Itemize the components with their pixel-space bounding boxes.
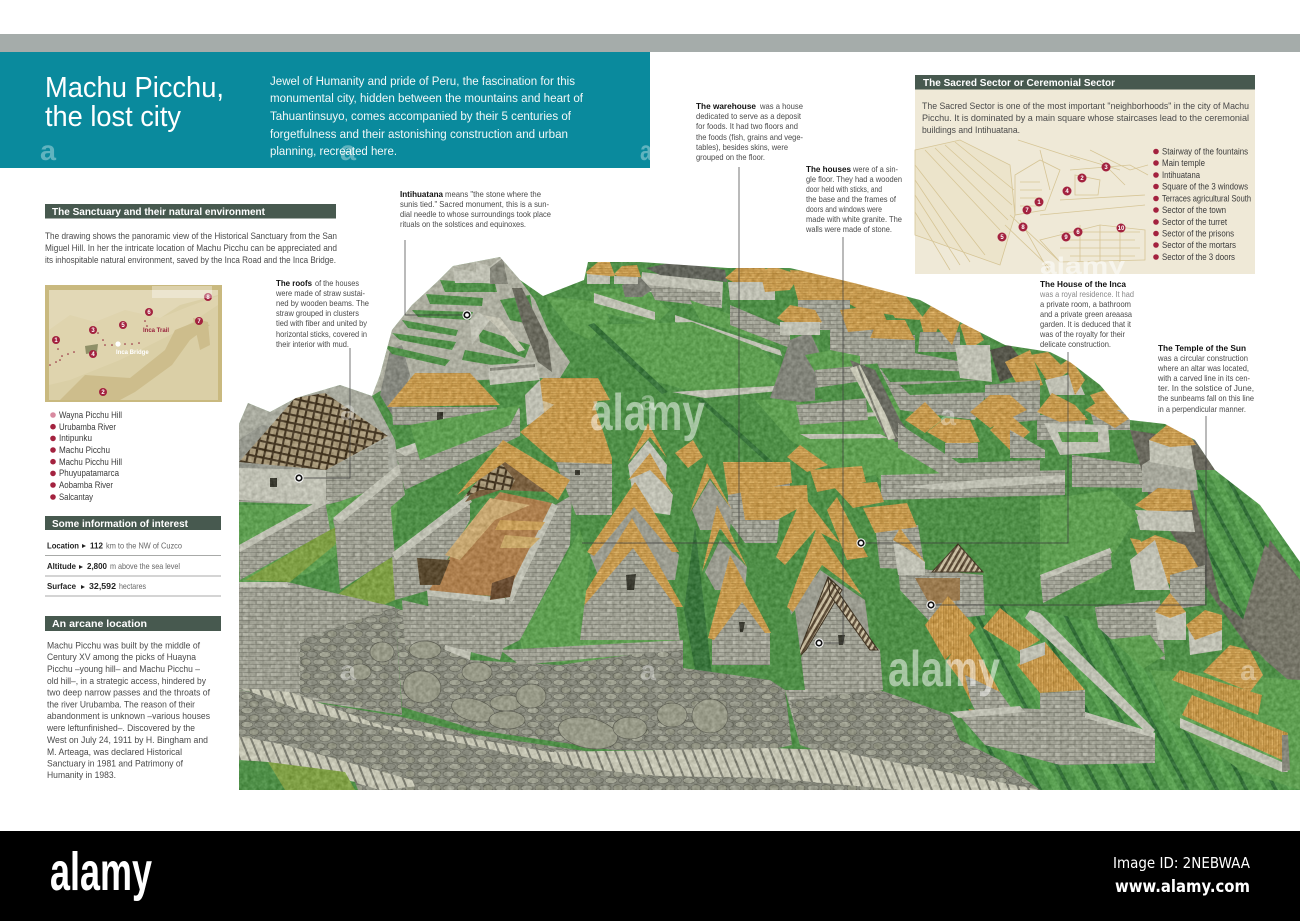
map numbers xyxy=(52,293,212,396)
small wall building xyxy=(488,362,540,385)
watermarks: a xyxy=(1240,655,1256,686)
facts table: 32,592 xyxy=(89,581,116,591)
footer image id xyxy=(1113,854,1251,897)
intro text: forgetfulness and their astonishing construction and urban xyxy=(270,127,568,141)
watermarks: a xyxy=(640,135,652,166)
callout: the house of the inca: The House of the Inca xyxy=(1040,279,1126,289)
location map: Inca Trail xyxy=(143,328,169,334)
callout: the house of the inca: garden. It is deduced that it xyxy=(1040,319,1132,329)
callout: the house of the inca: delicate construction. xyxy=(1040,339,1111,349)
markers xyxy=(294,310,936,648)
plan numbers: 4 xyxy=(1065,189,1069,195)
plan numbers: 5 xyxy=(1000,235,1004,241)
watermarks: a xyxy=(40,135,56,166)
central field xyxy=(588,322,950,480)
intro text: planning, recreated here. xyxy=(270,144,397,158)
heading: some information of interest: Some information of interest xyxy=(52,519,189,530)
footer logo: alamy xyxy=(50,842,152,902)
map legend: Urubamba River xyxy=(59,422,116,432)
gabled rows xyxy=(577,423,883,690)
stepped terraces centre right xyxy=(805,350,985,442)
plan legend: Main temple xyxy=(1162,158,1205,168)
callout: the warehouse: tables), besides skins, were xyxy=(696,142,788,152)
rock outcrop xyxy=(770,335,822,402)
plan legend xyxy=(1153,146,1251,262)
callout: the warehouse: for foods. It had two floors and xyxy=(696,121,798,131)
callout: the houses: doors and windows were xyxy=(806,204,882,214)
row a xyxy=(628,440,667,490)
map numbers: 8 xyxy=(206,295,210,301)
sector description: Picchu. It is dominated by a main square whose staircases lead to the ceremonial xyxy=(922,113,1249,123)
watermarks: a xyxy=(340,395,356,426)
plan legend: Intihuatana xyxy=(1162,170,1200,180)
callout: the warehouse: was a house xyxy=(759,101,803,111)
ground xyxy=(239,250,1300,795)
map numbers: 3 xyxy=(91,328,95,334)
sector description: The Sacred Sector is one of the most important "neighborhoods" in the city of Machu xyxy=(922,101,1249,111)
watermarks xyxy=(40,135,1256,697)
location map xyxy=(45,285,222,402)
facts table: 112 xyxy=(90,540,103,550)
callout: the temple of the sun: the sunbeams fall on this line xyxy=(1158,393,1254,403)
plan legend: Stairway of the fountains xyxy=(1162,146,1249,156)
row c xyxy=(776,495,840,565)
facts table xyxy=(45,540,221,596)
ridge houses xyxy=(725,265,1130,430)
callout: the roofs xyxy=(275,278,369,349)
callout: the house of the inca: and a private green areaasa xyxy=(1040,309,1132,319)
intro text: Tahuantinsuyo, comes accompanied by their 5 centuries of xyxy=(270,109,572,123)
plan numbers: 2 xyxy=(1080,176,1084,182)
callout: the houses: The houses xyxy=(806,164,851,174)
illustration: panoramic view of the citadel xyxy=(239,250,1300,795)
callout: intihuatana: dial needle to whose surroundings took place xyxy=(400,209,551,219)
watermarks: alamy xyxy=(590,384,705,442)
plan numbers: 3 xyxy=(1104,165,1108,171)
watermarks: a xyxy=(940,400,956,431)
callout: the roofs: The roofs xyxy=(276,278,312,288)
callout: the warehouse: The warehouse xyxy=(696,101,756,111)
plan legend: Sector of the mortars xyxy=(1162,240,1237,250)
heading: the sacred sector: The Sacred Sector or Ceremonial Sector xyxy=(923,78,1115,89)
callout: intihuatana: means "the stone where the xyxy=(445,189,541,199)
watermarks: a xyxy=(640,385,656,416)
text: arcane location: the river Urubamba. The reason of their xyxy=(47,700,195,710)
facts table: 2,800 xyxy=(87,561,107,571)
flat roofed houses xyxy=(723,445,925,575)
callout: the roofs: tied with fiber and united by xyxy=(276,318,368,328)
central thatched group xyxy=(898,544,1085,720)
callout: the house of the inca: was a royal residence. It had xyxy=(1039,289,1134,299)
plan numbers: 10 xyxy=(1118,226,1125,232)
callout: the house of the inca xyxy=(1039,279,1134,349)
plan numbers: 6 xyxy=(1076,230,1080,236)
heading: the sacred sector xyxy=(915,75,1255,90)
watermarks: a xyxy=(340,135,356,166)
facts table: hectares xyxy=(119,582,146,591)
callout: the houses: the base and the frames of xyxy=(806,194,897,204)
text: sanctuary description: its inhospitable natural environment, saved by the Inca Road and the Inca Bridge. xyxy=(45,255,336,265)
facts table: Surface xyxy=(47,581,76,591)
callout: intihuatana: sunis tied." Sacred monument, this is a sun- xyxy=(400,199,549,209)
map numbers: 7 xyxy=(197,319,201,325)
lower right terraces xyxy=(960,600,1300,790)
callout: intihuatana: rituals on the solstices and equinoxes. xyxy=(400,219,526,229)
callout: the roofs: straw grouped in clusters xyxy=(276,308,359,318)
callout: the roofs: horizontal sticks, covered in xyxy=(276,329,367,339)
sector description xyxy=(922,101,1249,135)
text: arcane location: M. Arteaga, was declared Historical xyxy=(47,747,182,757)
leader: roofs xyxy=(299,348,350,478)
temple of the sun and right slope xyxy=(1040,424,1300,690)
callout: the temple of the sun: where an altar was located, xyxy=(1157,363,1249,373)
text: arcane location: Humanity in 1983. xyxy=(47,770,116,780)
crenellated wall top xyxy=(785,690,880,744)
upper terraces xyxy=(545,262,790,356)
top houses xyxy=(586,262,615,278)
heading: an arcane location: An arcane location xyxy=(52,619,147,630)
callout: the temple of the sun: was a circular construction xyxy=(1157,353,1248,363)
map numbers: 2 xyxy=(101,390,105,396)
sector description: buildings and Intihuatana. xyxy=(922,125,1020,135)
map legend: Machu Picchu Hill xyxy=(59,457,122,467)
heading: some information of interest xyxy=(45,516,221,530)
text: arcane location: Sanctuary in 1981 and Patrimony of xyxy=(47,758,183,768)
callout: the houses xyxy=(805,164,902,234)
watermarks: a xyxy=(340,655,356,686)
plan legend: Sector of the prisons xyxy=(1162,228,1235,238)
map numbers: 4 xyxy=(91,352,95,358)
title: the lost city xyxy=(45,101,181,133)
callout: the temple of the sun xyxy=(1157,343,1254,414)
plan legend: Sector of the 3 doors xyxy=(1162,252,1236,262)
map numbers: 6 xyxy=(147,310,151,316)
leader: houses xyxy=(819,237,843,643)
footer image id: Image ID: 2NEBWAA xyxy=(1113,854,1251,872)
plan legend: Sector of the town xyxy=(1162,205,1226,215)
leader lines xyxy=(299,167,1206,643)
plan numbers xyxy=(998,162,1126,242)
text: arcane location: were leftunfinished–. Discovered by the xyxy=(46,723,195,733)
callout: the houses: were of a sin- xyxy=(852,164,898,174)
heading: an arcane location xyxy=(45,616,221,631)
main thatched houses xyxy=(387,373,612,515)
stairways xyxy=(239,688,1040,790)
callout: the roofs: were made of straw sustai- xyxy=(275,288,365,298)
intro text: Jewel of Humanity and pride of Peru, the fascination for this xyxy=(270,74,575,88)
text: arcane location: abandonment is unknown –various houses xyxy=(47,711,210,721)
facts table: Location xyxy=(47,540,79,550)
leader: temple of the sun xyxy=(931,416,1206,605)
watermarks: alamy xyxy=(1040,253,1126,280)
text: sanctuary description: The drawing shows the panoramic view of the Historical Sanctuary from the San xyxy=(45,231,337,241)
callout: the warehouse: grouped on the floor. xyxy=(696,152,765,162)
facts table: km to the NW of Cuzco xyxy=(106,542,182,550)
callout: intihuatana xyxy=(400,189,551,229)
plan numbers: 1 xyxy=(1037,200,1041,206)
hilltop buildings xyxy=(453,256,508,283)
open roof hut xyxy=(239,393,389,505)
callout: the houses: walls were made of stone. xyxy=(805,224,892,234)
watermarks: alamy xyxy=(888,641,1000,697)
text: sanctuary description: Miguel Hill. In her the intricate location of Machu Picchu can be appreciated and xyxy=(45,243,337,253)
intro text xyxy=(270,74,584,158)
callout: the houses: door held with sticks, and xyxy=(806,184,882,194)
callout: the warehouse: dedicated to serve as a deposit xyxy=(696,111,802,121)
top grey band xyxy=(0,34,1300,52)
row b xyxy=(675,440,703,468)
plan legend: Square of the 3 windows xyxy=(1162,182,1249,192)
header panel: title and intro xyxy=(0,52,650,168)
plan legend: Terraces agricultural South xyxy=(1162,194,1251,204)
text: arcane location xyxy=(46,640,210,780)
callout: the house of the inca: was of the royalty for their xyxy=(1039,329,1125,339)
plan numbers: 8 xyxy=(1021,225,1025,231)
location map: Inca Bridge xyxy=(116,350,149,356)
right compound xyxy=(881,380,1145,500)
text: sanctuary description xyxy=(45,231,337,265)
map legend: Aobamba River xyxy=(59,480,113,490)
map legend: Salcantay xyxy=(59,492,94,502)
text: arcane location: Picchu –young hill– and Machu Picchu – xyxy=(47,664,200,674)
trail dots xyxy=(49,320,148,366)
plan drawing xyxy=(915,140,1148,270)
green courts front xyxy=(520,530,680,665)
facts table: Altitude xyxy=(47,561,76,571)
plan legend: Sector of the turret xyxy=(1162,217,1227,227)
callout: the roofs: ned by wooden beams. The xyxy=(276,298,369,308)
text: arcane location: old hill–, in a strategic access, hindered by xyxy=(47,676,206,686)
callout: the warehouse xyxy=(696,101,803,162)
map legend: Machu Picchu xyxy=(59,445,110,455)
panel: the sacred sector xyxy=(915,75,1255,274)
text: arcane location: two deep narrow passes and the throats of xyxy=(47,688,210,698)
rocks back left xyxy=(239,385,400,480)
callout: the temple of the sun: The Temple of the Sun xyxy=(1158,343,1246,353)
map legend: Phuyupatamarca xyxy=(59,468,119,478)
text: arcane location: West on July 24, 1911 by H. Bingham and xyxy=(47,735,208,745)
callout: the house of the inca: a private room, a bathroom xyxy=(1040,299,1131,309)
callout: the temple of the sun: with a carved line in its cen- xyxy=(1157,373,1250,383)
leader: warehouse xyxy=(582,167,739,543)
leader: intihuatana xyxy=(405,240,467,315)
map legend: Wayna Picchu Hill xyxy=(59,410,122,420)
map numbers: 1 xyxy=(54,338,58,344)
callout: the roofs: of the houses xyxy=(315,278,359,288)
lower right houses xyxy=(1150,645,1300,790)
heading: the sanctuary: The Sanctuary and their natural environment xyxy=(52,207,266,218)
front boulder wall xyxy=(239,582,1155,790)
plan numbers: 9 xyxy=(1064,235,1068,241)
callout: the temple of the sun: ter. In the solstice of June, xyxy=(1158,383,1254,393)
intro text: monumental city, hidden between the mountains and heart of xyxy=(270,91,584,105)
open house with floor xyxy=(392,440,572,650)
callout: the houses: gle floor. They had a wooden xyxy=(806,174,902,184)
callout: the warehouse: the foods (fish, grains and vege- xyxy=(696,132,803,142)
plan numbers: 7 xyxy=(1025,208,1029,214)
title xyxy=(45,72,224,133)
terraced hill xyxy=(372,256,570,420)
long walls left xyxy=(239,405,520,615)
map legend: Intipunku xyxy=(59,433,92,443)
text: arcane location: Century XV among the picks of Huayna xyxy=(47,652,196,662)
leader: house of the inca xyxy=(861,352,1068,543)
callout: intihuatana: Intihuatana xyxy=(400,189,443,199)
map numbers: 5 xyxy=(121,323,125,329)
footer image id: www.alamy.com xyxy=(1115,877,1250,897)
watermarks: a xyxy=(640,655,656,686)
callout: the houses: made with white granite. The xyxy=(806,214,902,224)
footer bar xyxy=(0,831,1300,921)
text: arcane location: Machu Picchu was built by the middle of xyxy=(47,640,200,650)
map legend xyxy=(50,410,122,502)
callout: the roofs: their interior with mud. xyxy=(276,339,349,349)
title: Machu Picchu, xyxy=(45,72,224,104)
callout: the temple of the sun: in a perpendicular manner. xyxy=(1158,404,1246,414)
facts table: m above the sea level xyxy=(110,562,180,571)
heading: the sanctuary xyxy=(45,204,336,218)
